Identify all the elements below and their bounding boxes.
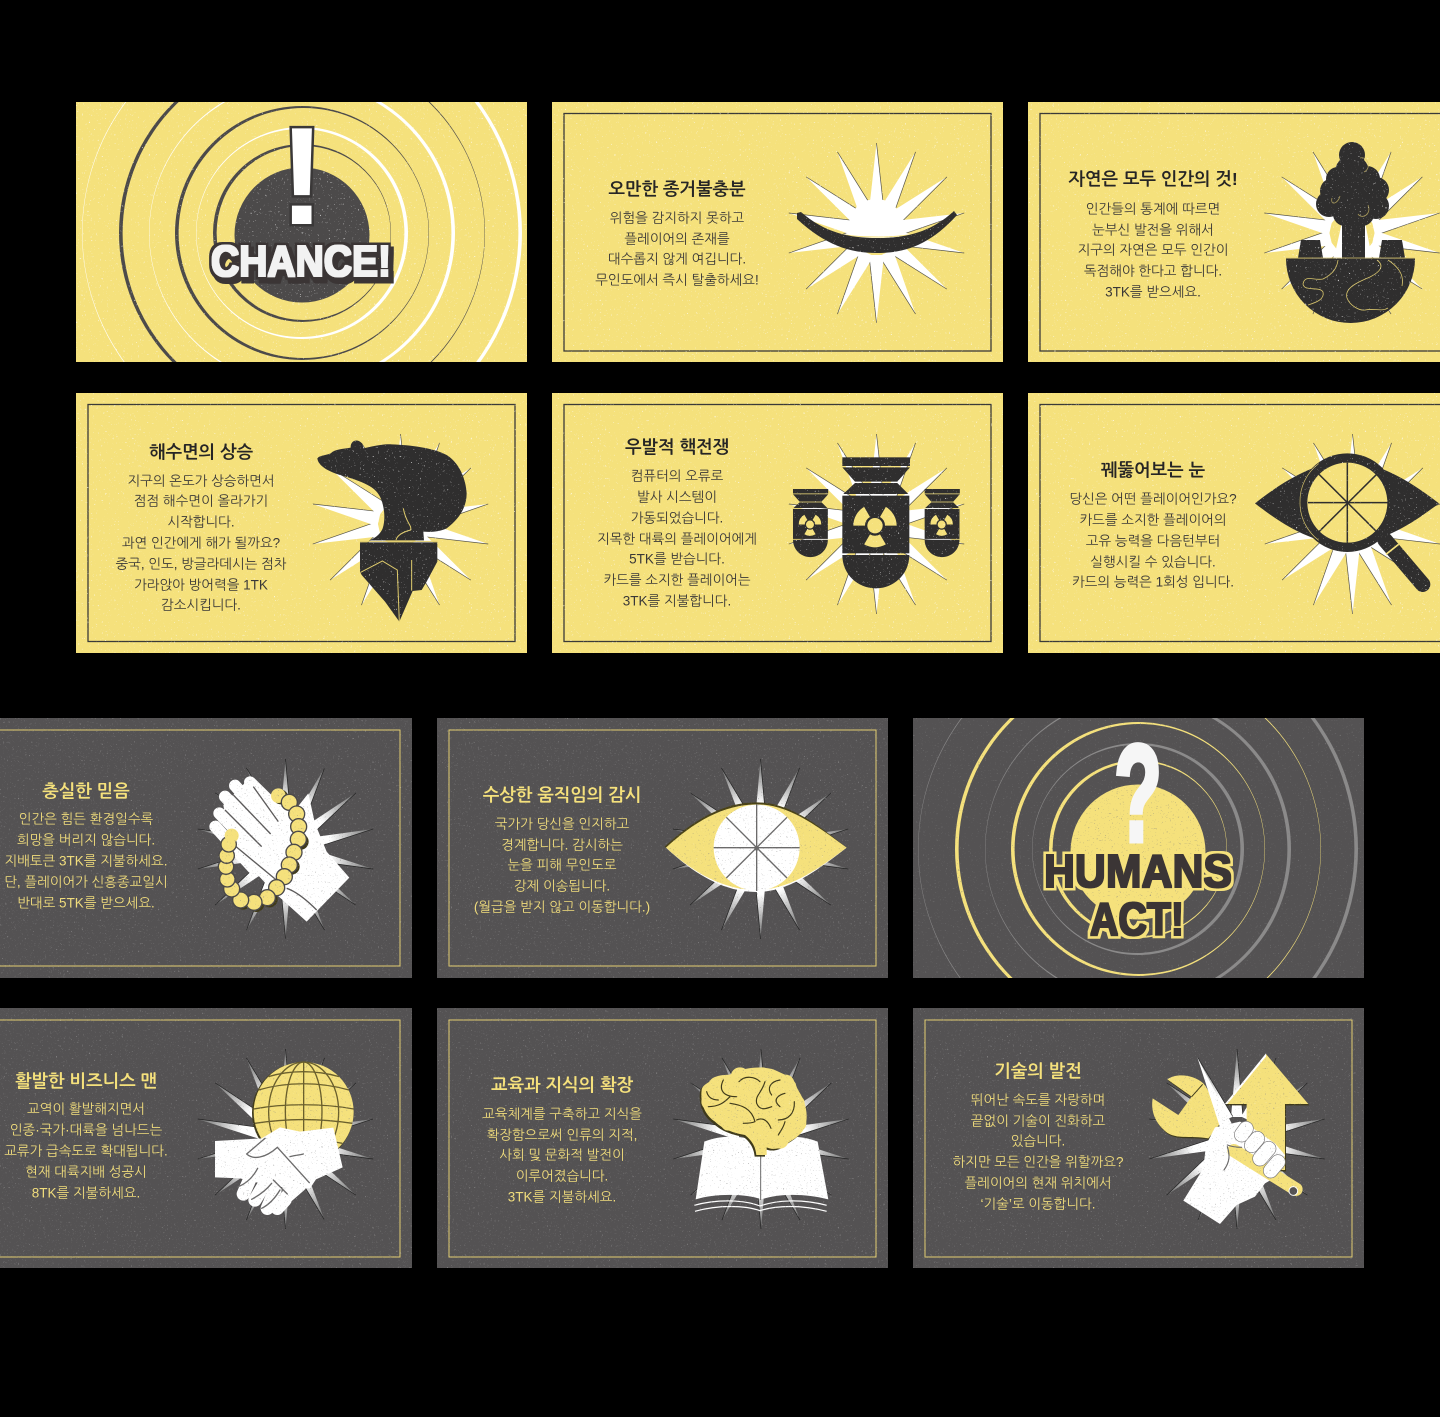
text block: 카드의 능력은 1회성 입니다.: [1072, 574, 1234, 590]
panel: 오만한 종거불충분: [552, 102, 1003, 362]
text block: (월급을 받지 않고 이동합니다.): [474, 900, 650, 914]
big question mark: ?: [1114, 717, 1162, 871]
text block: 카드를 소지한 플레이어는: [603, 572, 751, 588]
text block: 가라앉아 방어력을 1TK: [134, 578, 268, 592]
text block: 교류가 급속도로 확대됩니다.: [4, 1144, 168, 1158]
panel: 기술의 발전: [913, 1008, 1364, 1268]
heading: 수상한 움직임의 감시: [483, 785, 641, 805]
panel: chance cover card: [76, 102, 527, 362]
text block: 인간들의 통계에 따르면: [1086, 202, 1220, 216]
icon: eye with magnifying glass: [1255, 434, 1440, 614]
panel: 자연은 모두 인간의 것: [1028, 102, 1440, 362]
text block: 지목한 대륙의 플레이어에게: [597, 532, 757, 546]
text block: 위험을 감지하지 못하고: [610, 210, 745, 226]
text block: 중국, 인도, 방글라데시는 점차: [115, 556, 287, 572]
text block: 카드를 소지한 플레이어의: [1079, 512, 1227, 528]
text block: 3TK를 받으세요.: [1105, 284, 1201, 300]
text block: 컴퓨터의 오류로: [631, 468, 724, 484]
text block: 독점해야 한다고 합니다.: [1084, 264, 1222, 278]
text block: 무인도에서 즉시 탈출하세요!: [595, 272, 759, 288]
text block: 희망을 버리지 않습니다.: [17, 832, 155, 848]
title: ACT!: ACT!: [1090, 893, 1184, 945]
text block: 이루어졌습니다.: [516, 1168, 608, 1184]
text block: 반대로 5TK를 받으세요.: [17, 896, 155, 910]
text block: 확장함으로써 인류의 지적,: [487, 1128, 637, 1142]
text block: 고유 능력을 다음턴부터: [1086, 534, 1220, 548]
text block: 단, 플레이어가 신흥종교일시: [4, 874, 168, 890]
text block: 눈부신 발전을 위해서: [1092, 222, 1214, 238]
heading: 기술의 발전: [994, 1061, 1082, 1081]
text block: 8TK를 지불하세요.: [32, 1186, 140, 1200]
text block: 당신은 어떤 플레이어인가요?: [1069, 492, 1237, 506]
icon: three nuclear bombs: [787, 434, 966, 614]
icon: hand holding wrench with up arrow: [1148, 1049, 1326, 1229]
text block: 실행시킬 수 있습니다.: [1090, 554, 1216, 570]
icon: mushroom cloud over earth: [1263, 142, 1440, 323]
text block: 눈을 피해 무인도로: [507, 858, 617, 872]
text block: 교역이 활발해지면서: [27, 1102, 145, 1116]
panel: 꿰뚫어보는 눈: [1028, 393, 1440, 653]
text block: 있습니다.: [1011, 1134, 1065, 1148]
text block: 교육체계를 구축하고 지식을: [482, 1106, 642, 1122]
text block: 현재 대륙지배 성공시: [25, 1164, 147, 1180]
text block: 하지만 모든 인간을 위할까요?: [952, 1154, 1124, 1170]
concentric rings: [82, 102, 522, 362]
icon: bear on melting iceberg: [311, 434, 490, 622]
panel: 충실한 믿음: [0, 718, 412, 978]
icon: all-seeing eye: [665, 759, 850, 939]
icon: brain over open book: [672, 1049, 850, 1229]
text block: 발사 시스템이: [637, 490, 717, 504]
text block: 경계합니다. 감시하는: [501, 838, 623, 852]
panel: 해수면의 상승: [76, 393, 527, 653]
text block: 3TK를 지불합니다.: [623, 594, 731, 608]
heading: 자연은 모두 인간의 것!: [1068, 169, 1238, 189]
heading: 해수면의 상승: [149, 442, 254, 462]
text block: 인종·국가·대륙을 넘나드는: [10, 1122, 162, 1138]
panel: 수상한 움직임의 감시: [437, 718, 888, 978]
text block: 감소시킵니다.: [161, 598, 241, 612]
text block: 인간은 힘든 환경일수록: [19, 812, 154, 826]
text block: 플레이어의 현재 위치에서: [964, 1176, 1112, 1190]
text block: 지구의 자연은 모두 인간이: [1078, 242, 1228, 258]
icon: handshake over globe: [196, 1049, 375, 1229]
text block: 플레이어의 존재를: [624, 232, 730, 246]
heading: 활발한 비즈니스 맨: [15, 1071, 157, 1091]
text block: 지구의 온도가 상승하면서: [127, 474, 275, 488]
text block: 시작합니다.: [167, 514, 235, 530]
panel: 교육과 지식의 확장: [437, 1008, 888, 1268]
panel: 활발한 비즈니스 맨: [0, 1008, 412, 1268]
icon: praying hands with beads: [196, 759, 375, 939]
text block: 가동되었습니다.: [631, 510, 723, 526]
icon: smile over starburst: [787, 143, 966, 323]
text block: 점점 해수면이 올라가기: [134, 494, 268, 508]
text block: 끝없이 기술이 진화하고: [971, 1114, 1106, 1128]
big exclamation mark: !: [279, 99, 325, 254]
title: CHANCE!: CHANCE!: [211, 237, 391, 286]
text block: ‘기술’로 이동합니다.: [980, 1196, 1096, 1212]
text block: 지배토큰 3TK를 지불하세요.: [5, 854, 167, 868]
concentric rings: [918, 718, 1358, 978]
heading: 꿰뚫어보는 눈: [1101, 460, 1206, 480]
heading: 충실한 믿음: [42, 781, 130, 801]
text block: 5TK를 받습니다.: [629, 552, 725, 566]
text block: 뛰어난 속도를 자랑하며: [971, 1092, 1105, 1108]
panel: 우발적 핵전쟁: [552, 393, 1003, 653]
text block: 대수롭지 않게 여깁니다.: [608, 252, 746, 266]
heading: 교육과 지식의 확장: [491, 1075, 633, 1095]
text block: 국가가 당신을 인지하고: [495, 816, 630, 832]
text block: 사회 및 문화적 발전이: [499, 1148, 625, 1162]
text block: 강제 이송됩니다.: [514, 878, 610, 894]
text block: 과연 인간에게 해가 될까요?: [122, 536, 280, 550]
panel: humans act cover card: [913, 718, 1364, 978]
heading: 오만한 종거불충분: [608, 179, 746, 199]
text block: 3TK를 지불하세요.: [508, 1190, 616, 1204]
heading: 우발적 핵전쟁: [625, 437, 729, 457]
title: HUMANS: HUMANS: [1044, 845, 1232, 897]
